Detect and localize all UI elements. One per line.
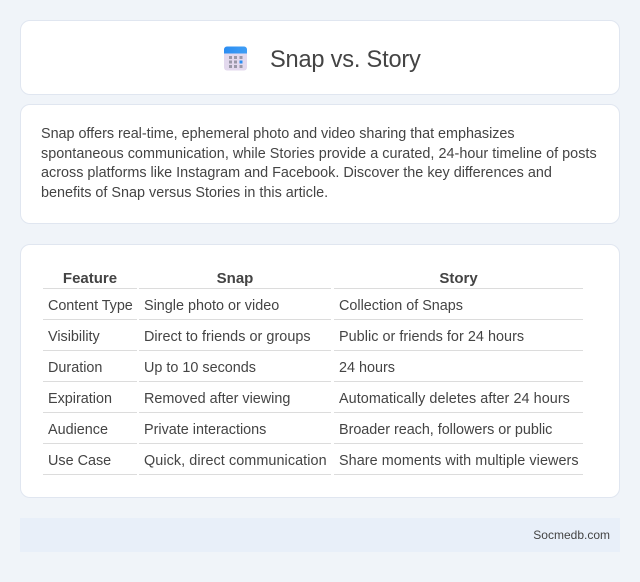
table header: Snap bbox=[217, 270, 253, 287]
row: audience: Private interactions bbox=[144, 422, 266, 438]
row: duration: Duration bbox=[48, 360, 102, 376]
row: duration: 24 hours bbox=[339, 360, 395, 376]
table header: Story bbox=[439, 270, 478, 287]
row: audience: Audience bbox=[48, 422, 108, 438]
row: duration: Up to 10 seconds bbox=[144, 360, 256, 376]
panel: comparison table bbox=[20, 244, 620, 498]
row: expiration: Automatically deletes after 24 hours bbox=[339, 391, 570, 407]
footer credit: Socmedb.com bbox=[533, 528, 610, 542]
row: audience: Broader reach, followers or public bbox=[339, 422, 552, 438]
table header: Feature bbox=[63, 270, 117, 287]
intro text: Snap offers real-time, ephemeral photo and video sharing that emphasizes bbox=[41, 126, 515, 142]
title: Snap vs. Story bbox=[270, 47, 421, 73]
panel: title card bbox=[20, 20, 620, 95]
row: content type: Single photo or video bbox=[144, 298, 279, 314]
row: use case: Quick, direct communication bbox=[144, 453, 327, 469]
row: visibility: Visibility bbox=[48, 329, 100, 345]
row: use case bbox=[48, 453, 579, 469]
row: visibility: Direct to friends or groups bbox=[144, 329, 311, 345]
row: content type: Content Type bbox=[48, 298, 133, 314]
row: expiration: Removed after viewing bbox=[144, 391, 290, 407]
table header bbox=[63, 270, 478, 287]
row: content type: Collection of Snaps bbox=[339, 298, 463, 314]
panel: introduction bbox=[20, 104, 620, 224]
icon: calendar bbox=[224, 46, 247, 70]
row: visibility bbox=[48, 329, 524, 345]
row: content type bbox=[48, 298, 463, 314]
row: use case: Share moments with multiple viewers bbox=[339, 453, 579, 469]
footer bar bbox=[20, 518, 620, 552]
row: duration bbox=[48, 360, 395, 376]
intro text bbox=[41, 126, 597, 200]
row: expiration: Expiration bbox=[48, 391, 112, 407]
row: expiration bbox=[48, 391, 570, 407]
intro text: benefits of Snap versus Stories in this article. bbox=[41, 184, 328, 200]
row: visibility: Public or friends for 24 hours bbox=[339, 329, 524, 345]
intro text: spontaneous communication, while Stories provide a curated, 24-hour timeline of posts bbox=[41, 146, 597, 162]
row: use case: Use Case bbox=[48, 453, 111, 469]
intro text: across platforms like Instagram and Facebook. Discover the key differences and bbox=[41, 165, 552, 181]
row: audience bbox=[48, 422, 552, 438]
